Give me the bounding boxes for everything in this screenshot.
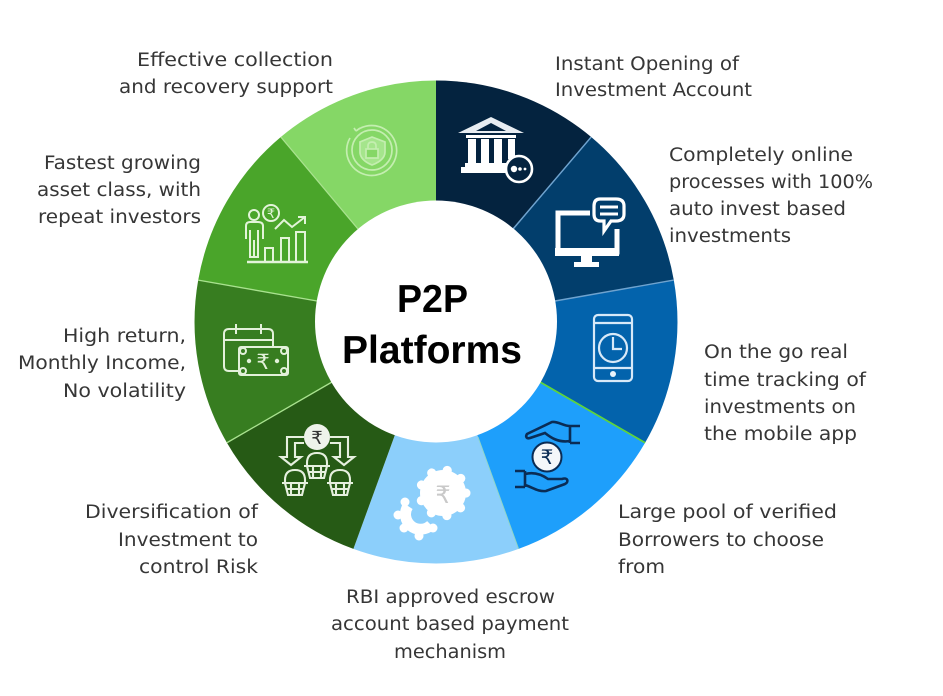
segment: real time tracking xyxy=(436,280,677,443)
icon: computer with chat bubble xyxy=(555,199,624,267)
ring segments xyxy=(195,80,677,563)
text: effective collection: and recovery support xyxy=(119,77,333,98)
text: escrow account: account based payment xyxy=(331,614,569,635)
icon: gears with rupee xyxy=(394,470,466,540)
icon: investor with growth chart: ₹ xyxy=(267,207,275,222)
icon: gears with rupee: ₹ xyxy=(435,481,451,509)
icon: calendar and banknote xyxy=(224,324,288,375)
text: diversification: Investment to xyxy=(118,530,258,551)
text: verified borrowers: Large pool of verified xyxy=(618,502,837,523)
text: real time tracking: On the go real xyxy=(704,342,848,363)
text: completely online: auto invest based xyxy=(669,199,846,220)
icon: baskets with rupee xyxy=(281,424,354,495)
icon: hands holding rupee coin xyxy=(515,422,580,491)
text: high return: No volatility xyxy=(63,381,186,402)
segment: instant opening xyxy=(436,80,591,322)
text: escrow account: RBI approved escrow xyxy=(346,587,555,608)
text: effective collection xyxy=(119,50,333,98)
text: fastest growing xyxy=(37,153,201,228)
icon: mobile phone with clock xyxy=(594,315,632,381)
text: instant opening xyxy=(555,54,752,101)
segment: collection support xyxy=(281,80,436,322)
segment: completely online xyxy=(436,137,674,322)
text: completely online: investments xyxy=(669,226,791,247)
text: high return: High return, xyxy=(63,326,186,347)
text: instant opening: Investment Account xyxy=(555,80,752,101)
text: verified borrowers: Borrowers to choose xyxy=(618,530,824,551)
icon: bank xyxy=(458,117,532,182)
text: real time tracking: time tracking of xyxy=(704,370,867,391)
title xyxy=(342,278,522,372)
text: completely online xyxy=(669,145,873,247)
segment: fastest growing xyxy=(198,137,436,322)
title: P2P xyxy=(397,278,468,321)
text: verified borrowers xyxy=(618,502,837,578)
text: diversification xyxy=(85,502,259,578)
text: fastest growing: repeat investors xyxy=(38,207,201,228)
segment: high return xyxy=(195,280,436,443)
text: effective collection: Effective collection xyxy=(137,50,333,71)
segment: escrow account xyxy=(353,322,519,563)
text: fastest growing: asset class, with xyxy=(37,180,201,201)
icon: investor with growth chart xyxy=(246,205,308,262)
segment: verified borrowers xyxy=(436,322,645,549)
text: escrow account xyxy=(331,587,569,663)
segment: diversification xyxy=(227,322,436,549)
text: high return xyxy=(18,326,186,402)
text: real time tracking: investments on xyxy=(704,397,856,418)
text: real time tracking xyxy=(704,342,867,445)
text: fastest growing: Fastest growing xyxy=(44,153,201,174)
icon: hands holding rupee coin: ₹ xyxy=(541,445,553,469)
icon: calendar and banknote: ₹ xyxy=(256,350,270,374)
text: diversification: Diversification of xyxy=(85,502,259,523)
text: instant opening: Instant Opening of xyxy=(555,54,740,75)
text: escrow account: mechanism xyxy=(394,642,506,663)
icon: shield with lock xyxy=(347,125,397,175)
text: completely online: Completely online xyxy=(669,145,853,166)
centre circle xyxy=(315,200,557,442)
text: high return: Monthly Income, xyxy=(18,353,186,374)
text: completely online: processes with 100% xyxy=(669,172,873,193)
icon: baskets with rupee: ₹ xyxy=(311,428,323,449)
text: real time tracking: the mobile app xyxy=(704,424,857,445)
text: diversification: control Risk xyxy=(139,557,258,578)
title: Platforms xyxy=(342,329,522,372)
text: verified borrowers: from xyxy=(618,557,665,578)
